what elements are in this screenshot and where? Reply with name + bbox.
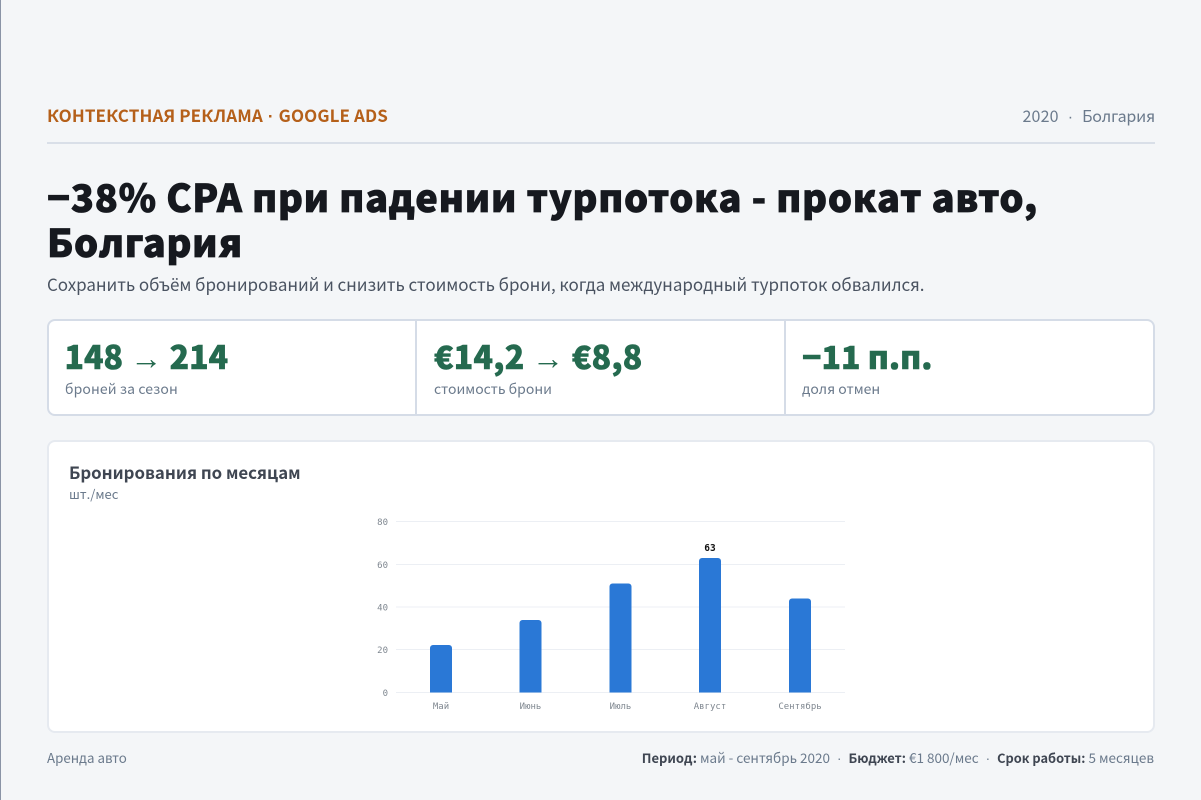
KPI: booking cost: стоимость брони [434, 379, 552, 399]
y axis labels: 0 [383, 689, 388, 699]
chart title: Бронирования по месяцам [69, 460, 301, 484]
panel: chart [47, 440, 1155, 733]
y axis labels: 60 [377, 561, 388, 571]
KPI: cancellations [802, 332, 932, 399]
footer: left note: Аренда авто [47, 748, 127, 767]
bar chart [377, 518, 845, 712]
panel: KPI strip [47, 319, 1155, 416]
title: Болгария [47, 212, 243, 268]
title: −38% CPA при падении турпотока - прокат авто, [47, 168, 1038, 222]
x axis labels: Июль [610, 702, 631, 712]
x axis labels: Сентябрь [778, 701, 822, 712]
x axis labels: Май [433, 702, 449, 712]
footer: campaign details: Период: май - сентябрь 2020 · Бюджет: €1 800/мес · Срок работы: 5 месяцев [642, 747, 1154, 767]
KPI: booking cost: €14,2 → €8,8 [434, 332, 643, 378]
x axis labels: Июнь [520, 702, 541, 712]
x axis labels: Август [694, 702, 726, 712]
bars [430, 558, 811, 692]
page edge line [0, 0, 1, 800]
KPI: cancellations: −11 п.п. [802, 332, 932, 378]
KPI: bookings: 148 → 214 [64, 332, 228, 378]
KPI: booking cost [417, 321, 786, 414]
y axis labels: 80 [377, 518, 388, 528]
meta: year and country: 2020 · Болгария [1022, 102, 1155, 126]
KPI: bookings [49, 321, 417, 414]
subtitle: Сохранить объём бронирований и снизить стоимость брони, когда международный турпоток обвалился. [47, 271, 924, 296]
y axis labels: 40 [377, 604, 388, 614]
chart unit: шт./мес [69, 484, 118, 503]
value label: August: 63 [704, 543, 716, 554]
y axis labels [377, 518, 388, 699]
title [47, 168, 1038, 268]
KPI: cancellations: доля отмен [802, 379, 880, 399]
x axis labels [433, 701, 822, 712]
eyebrow: category: КОНТЕКСТНАЯ РЕКЛАМА · GOOGLE ADS [47, 102, 388, 127]
y axis labels: 20 [377, 646, 388, 656]
KPI: bookings: броней за сезон [65, 379, 178, 399]
